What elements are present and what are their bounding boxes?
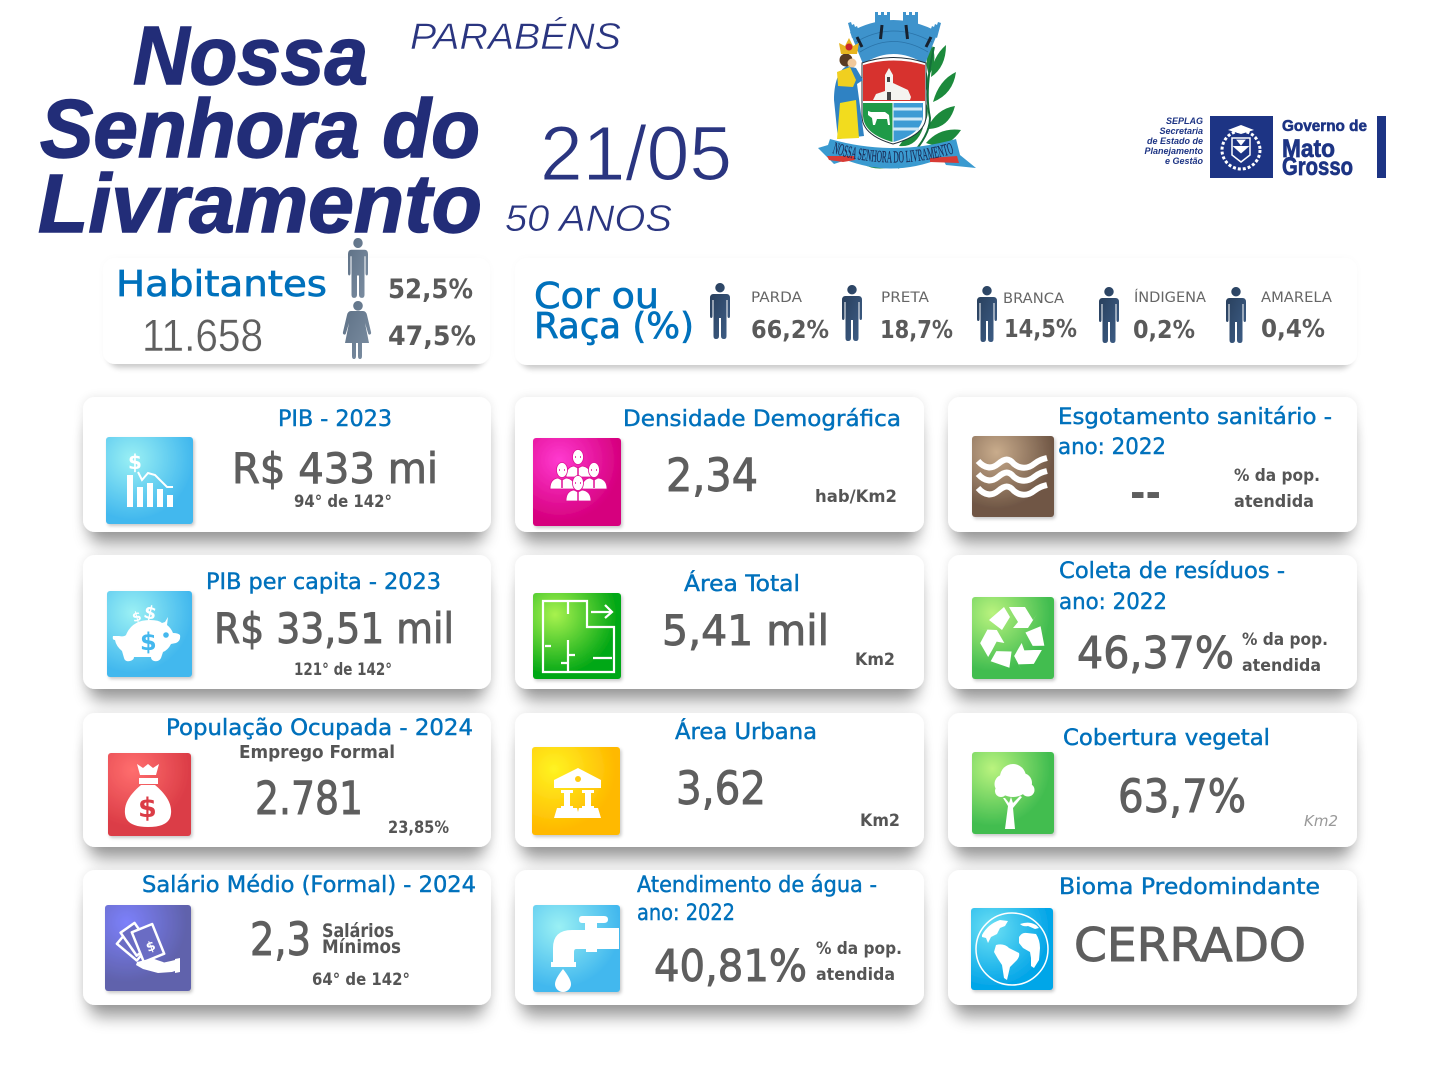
value: R$ 433 mi: [232, 444, 438, 493]
icon: money bag: [108, 753, 191, 836]
unit: % da pop.: [1242, 630, 1328, 650]
logo: SEPLAG Governo de Mato Grosso: Secretaria: [1159, 126, 1203, 136]
icon: floor plan: [533, 593, 621, 679]
icon: woman: [343, 301, 371, 359]
value: 2,34: [666, 449, 758, 502]
heading: Área Urbana: [675, 719, 817, 745]
unit: atendida: [1234, 492, 1314, 512]
title: [38, 9, 482, 250]
heading: Coleta de resíduos -: [1059, 559, 1285, 584]
heading: Densidade Demográfica: [623, 407, 901, 432]
unit: atendida: [1242, 656, 1321, 676]
figure: amarela: [1226, 287, 1246, 343]
panel: cor ou raça: Cor ou: [534, 276, 659, 317]
heading: ano: 2022: [1059, 590, 1167, 615]
panel: salário médio: [83, 870, 491, 1005]
icon: hand with money: $: [144, 939, 158, 956]
logo: SEPLAG Governo de Mato Grosso: Planejamento: [1144, 146, 1203, 156]
panel: coleta de resíduos: [948, 555, 1357, 689]
logo: SEPLAG Governo de Mato Grosso: e Gestão: [1165, 156, 1203, 166]
text: parabéns: PARABÉNS: [410, 16, 621, 57]
logo: SEPLAG Governo de Mato Grosso: [1144, 116, 1386, 181]
panel: esgotamento: [948, 397, 1357, 532]
panel: PIB per capita: [83, 555, 491, 689]
figure: indígena: [1099, 287, 1119, 343]
value: 5,41 mil: [662, 606, 829, 655]
logo: SEPLAG Governo de Mato Grosso: de Estado de: [1147, 136, 1203, 146]
label: branca: 14,5%: [1004, 314, 1077, 343]
panel: cor ou raça: [515, 258, 1357, 365]
heading: População Ocupada - 2024: [166, 716, 473, 741]
label: branca: BRANCA: [1003, 291, 1064, 307]
icon: money bag: $: [138, 793, 157, 824]
panel: bioma: [948, 870, 1357, 1005]
value: 46,37%: [1077, 628, 1234, 679]
label: parda: PARDA: [751, 290, 802, 306]
heading: Atendimento de água -: [637, 873, 877, 898]
title: Nossa: [133, 9, 368, 102]
figure: preta: [842, 285, 862, 341]
icon: globe: [971, 908, 1053, 990]
value: 52,5%: 52,5%: [388, 274, 473, 305]
label: parda: 66,2%: [751, 315, 829, 344]
subheading: Emprego Formal: [239, 742, 395, 763]
icon: piggy bank: $: [142, 602, 158, 625]
unit: [1242, 630, 1328, 676]
value: 3,62: [676, 762, 766, 815]
icon: waves: [972, 436, 1054, 517]
icon: piggy bank: $: [131, 609, 143, 626]
label: parda: [751, 290, 829, 344]
unit: hab/Km2: [815, 487, 897, 507]
heading: [637, 873, 877, 926]
label: indígena: 0,2%: [1133, 315, 1195, 344]
label: branca: [1003, 291, 1077, 343]
unit: Km2: [855, 650, 895, 670]
icon: municipal coat of arms: NOSSA SENHORA DO LIVRAMENTO: [832, 142, 953, 163]
text: 50 anos: 50 ANOS: [505, 198, 672, 239]
value: 2.781: [255, 772, 363, 825]
unit: Km2: [1304, 812, 1338, 830]
icon: water tap: [533, 905, 620, 992]
icon: piggy bank: $: [140, 628, 157, 656]
heading: Bioma Predomindante: [1059, 875, 1320, 900]
value: 2,3: [250, 913, 311, 966]
panel: habitantes: Habitantes: [116, 264, 327, 305]
rank: 94° de 142°: [294, 492, 392, 512]
title: Livramento: [38, 157, 482, 250]
label: indígena: ÍNDIGENA: [1134, 289, 1206, 306]
heading: [1059, 559, 1285, 615]
label: amarela: AMARELA: [1261, 290, 1332, 306]
icon: recycle: [972, 597, 1054, 679]
heading: PIB per capita - 2023: [206, 570, 441, 595]
heading: [1058, 405, 1332, 460]
panel: cor ou raça: Raça (%): [534, 306, 694, 347]
unit: [322, 920, 401, 958]
unit: [816, 939, 902, 985]
icon: tree: [972, 752, 1054, 834]
panel: habitantes: 11.658: [142, 310, 263, 361]
logo: SEPLAG Governo de Mato Grosso: Grosso: [1282, 153, 1353, 181]
date: 21/05: [540, 111, 732, 197]
value: CERRADO: [1074, 918, 1306, 972]
value: 47,5%: 47,5%: [388, 321, 476, 352]
heading: Salário Médio (Formal) - 2024: [142, 873, 476, 898]
value: R$ 33,51 mil: [214, 604, 454, 653]
heading: Cobertura vegetal: [1063, 726, 1270, 751]
rank: 64° de 142°: [312, 970, 410, 990]
heading: Esgotamento sanitário -: [1058, 405, 1332, 430]
value: --: [1130, 468, 1161, 517]
icon: falling chart: $: [128, 450, 142, 474]
unit: % da pop.: [1234, 466, 1320, 486]
panel: cobertura vegetal: [948, 713, 1357, 847]
panel: habitantes: [103, 238, 490, 364]
value: 63,7%: [1118, 770, 1246, 823]
heading: PIB - 2023: [278, 407, 392, 432]
icon: falling chart: [106, 437, 193, 524]
icon: hand with money: [105, 905, 191, 991]
panel: área urbana: [515, 713, 924, 847]
unit: atendida: [816, 965, 895, 985]
title: Senhora do: [40, 82, 480, 175]
heading: ano: 2022: [1058, 435, 1166, 460]
unit: Mínimos: [322, 936, 401, 958]
logo: SEPLAG Governo de Mato Grosso: Governo de: [1282, 118, 1367, 135]
panel: atendimento de água: [515, 870, 924, 1005]
icon: man: [348, 238, 368, 298]
rank: 121° de 142°: [294, 660, 392, 680]
unit: Km2: [860, 811, 900, 831]
label: preta: [880, 290, 953, 344]
icon: piggy bank: [107, 591, 192, 677]
figure: branca: [977, 286, 997, 342]
panel: área total: [515, 555, 924, 689]
panel: população ocupada: [83, 713, 491, 847]
label: preta: PRETA: [881, 290, 929, 306]
logo: SEPLAG Governo de Mato Grosso: SEPLAG: [1166, 116, 1203, 126]
logo: SEPLAG Governo de Mato Grosso: Mato: [1282, 135, 1335, 163]
value: 40,81%: [654, 941, 807, 992]
panel: PIB: [83, 397, 491, 532]
share: 23,85%: [388, 818, 449, 838]
unit: Salários: [322, 920, 394, 942]
label: preta: 18,7%: [880, 315, 953, 344]
figure: parda: [710, 283, 730, 339]
heading: Área Total: [684, 571, 800, 597]
label: amarela: [1261, 290, 1332, 343]
heading: ano: 2022: [637, 901, 735, 926]
unit: [1234, 466, 1320, 512]
label: indígena: [1133, 289, 1206, 344]
label: amarela: 0,4%: [1261, 314, 1325, 343]
icon: municipal coat of arms: [818, 12, 976, 169]
icon: public building: [532, 747, 620, 835]
unit: % da pop.: [816, 939, 902, 959]
panel: densidade: [515, 397, 924, 532]
icon: people: [533, 438, 621, 526]
